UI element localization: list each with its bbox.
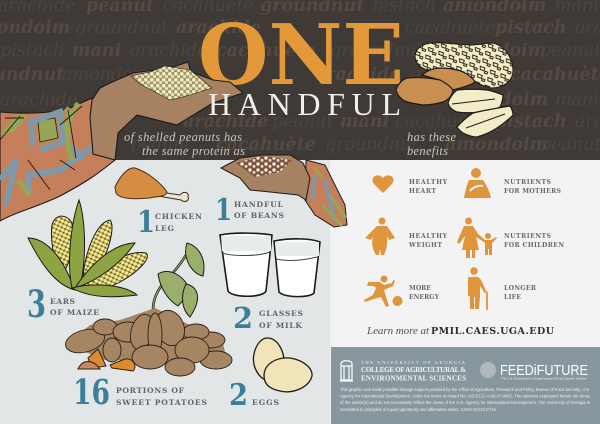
peanut shell — [415, 43, 513, 88]
call to action: learn more: PMIL.CAES.UGA.EDU — [431, 326, 555, 337]
funding disclaimer: committed to principles of equal opportunity and affirmative action. CAES-OCCS FY15 — [340, 407, 497, 412]
repeating word pattern: peanut — [130, 135, 193, 155]
repeating word pattern: peanut — [540, 41, 600, 61]
benefit: nutrients for children — [457, 218, 564, 258]
label: 16 portions of sweet potatoes: 16 — [73, 372, 110, 413]
benefit: nutrients for children: FOR CHILDREN — [504, 242, 564, 249]
illustration: sweet potatoes — [63, 243, 232, 376]
title: ONE: ONE — [198, 6, 404, 104]
dark header band — [0, 0, 600, 160]
label: 1 handful of beans: OF BEANS — [234, 211, 285, 220]
text: has these: has these — [407, 130, 456, 144]
university name: COLLEGE OF AGRICULTURAL & — [361, 366, 466, 374]
repeating word pattern: amondoim — [62, 65, 155, 85]
text: the same protein as: the same protein as — [142, 144, 245, 158]
repeating word pattern: cacahuète — [405, 18, 496, 38]
benefit: longer life: LONGER — [504, 285, 537, 292]
hand — [221, 155, 310, 200]
university name — [361, 360, 466, 382]
label: 1 chicken leg: 1 — [137, 205, 155, 240]
label: 2 eggs: 2 — [229, 378, 248, 413]
husk leaves — [28, 238, 75, 290]
repeating word pattern: pistach — [495, 18, 567, 38]
repeating word pattern: arachide — [315, 65, 400, 85]
university name: ENVIRONMENTAL SCIENCES — [361, 374, 466, 382]
leaves and stem — [153, 243, 204, 317]
repeating word pattern: arachide — [0, 90, 77, 110]
call to action: learn more: Learn more at — [366, 325, 430, 337]
funding disclaimer: This graphic was made possible through support provided by the Office of Agriculture, Research and Policy, Bureau of Food Security, U.S. — [340, 387, 590, 392]
repeating word pattern: groundnut — [325, 135, 419, 155]
benefit: longer life: LIFE — [504, 294, 521, 301]
repeating word pattern: peanut — [272, 112, 335, 132]
benefit: healthy weight — [365, 218, 448, 255]
benefit: healthy weight: WEIGHT — [408, 242, 442, 249]
benefit: nutrients for mothers: NUTRIENTS — [504, 179, 552, 186]
benefit: healthy heart: HEALTHY — [409, 179, 448, 186]
repeating word pattern: cacahuète — [216, 41, 316, 61]
benefit: nutrients for mothers: FOR MOTHERS — [504, 188, 562, 195]
repeating word pattern: groundnut — [75, 18, 169, 38]
repeating word pattern: mani — [340, 112, 389, 132]
hand — [90, 62, 243, 160]
repeating word pattern: arachide — [183, 112, 268, 132]
funding disclaimer: Agency for International Development, under the terms of Award No. AID-ECG-A-00-07-0001. The opinions expressed herein are those — [340, 394, 591, 398]
label: 3 ears of maize: 3 — [27, 282, 46, 326]
repeating word pattern: arachide — [176, 18, 261, 38]
label: 16 portions of sweet potatoes — [73, 372, 208, 413]
repeating word pattern: cacahuète — [395, 112, 486, 132]
logo: USAID seal — [480, 362, 496, 378]
label: 2 glasses of milk — [233, 301, 304, 335]
benefit: nutrients for mothers — [464, 168, 562, 198]
label: 2 glasses of milk: 2 — [233, 301, 253, 335]
benefit: healthy heart — [373, 175, 448, 195]
call to action: learn more — [366, 325, 555, 337]
benefit: healthy weight: HEALTHY — [409, 233, 448, 240]
repeating word pattern — [0, 0, 600, 155]
label: 1 handful of beans: HANDFUL — [234, 200, 284, 209]
label: 3 ears of maize: EARS — [50, 297, 76, 306]
label: 1 chicken leg: CHICKEN — [155, 212, 202, 221]
repeating word pattern: arachide — [130, 41, 207, 61]
right benefits background — [330, 160, 600, 424]
repeating word pattern: mani — [72, 41, 121, 61]
label: 1 handful of beans — [215, 193, 285, 228]
repeating word pattern: cacahuète — [216, 135, 316, 155]
sliced orange pieces — [88, 349, 106, 368]
repeating word pattern: amondoim — [443, 41, 546, 61]
label: 1 chicken leg: LEG — [155, 224, 174, 233]
footer panel — [331, 347, 600, 424]
cream kernel top — [448, 89, 503, 113]
repeating word pattern: pistach — [495, 112, 567, 132]
benefit: longer life — [468, 267, 537, 310]
repeating word pattern: groundnut — [410, 65, 504, 85]
Feed the Future logo: The U.S. Government's Global Hunger & Food Security Initiative — [501, 376, 587, 380]
benefit: more energy: ENERGY — [409, 294, 440, 301]
label: 2 glasses of milk: GLASSES — [259, 309, 304, 318]
illustration: hand with beans — [221, 155, 347, 227]
illustration: glasses of milk — [220, 233, 320, 297]
repeating word pattern: pistach — [0, 41, 64, 61]
label: 2 eggs: EGGS — [252, 398, 280, 407]
tan kernel front — [396, 78, 453, 105]
funding disclaimer: of the author(s) and do not necessarily reflect the views of the U.S. Agency for International Development. The University of Georgia is — [340, 400, 590, 405]
tan kernel back — [422, 68, 475, 90]
sleeve — [305, 160, 347, 227]
cream kernel bottom — [457, 106, 513, 137]
benefit: healthy heart: HEART — [409, 188, 436, 195]
benefit: more energy: MORE — [409, 285, 431, 292]
funding disclaimer — [340, 387, 591, 412]
title: HANDFUL: HANDFUL — [208, 86, 401, 122]
university name: THE UNIVERSITY OF GEORGIA — [361, 360, 466, 365]
repeating word pattern: groundnut — [330, 41, 424, 61]
illustration: chicken leg — [115, 168, 188, 201]
benefit: nutrients for children: NUTRIENTS — [504, 233, 552, 240]
label: 1 handful of beans: 1 — [215, 193, 232, 228]
label: 16 portions of sweet potatoes: SWEET POTATOES — [116, 398, 208, 407]
repeating word pattern: amondoim — [445, 135, 548, 155]
illustration: maize — [28, 200, 147, 297]
illustration: whole peanut and shelled kernels — [396, 43, 513, 137]
potato pile — [63, 306, 232, 376]
label: 16 portions of sweet potatoes: PORTIONS OF — [116, 386, 185, 395]
label: 2 eggs — [229, 378, 280, 413]
repeating word pattern: mani — [555, 90, 599, 110]
left glass — [220, 233, 272, 296]
repeating word pattern: peanut — [540, 135, 600, 155]
right glass — [274, 239, 320, 297]
label: 1 chicken leg — [137, 205, 202, 240]
sleeve — [0, 98, 115, 221]
Feed the Future logo: FEEDiFUTURE — [500, 363, 588, 379]
benefit: more energy — [364, 276, 440, 307]
label: 2 glasses of milk: OF MILK — [259, 321, 302, 330]
illustration: eggs — [253, 338, 312, 392]
label: 3 ears of maize — [27, 282, 99, 326]
beans — [236, 156, 292, 177]
text: of shelled peanuts has: of shelled peanuts has — [124, 130, 242, 144]
text: benefits: benefits — [407, 144, 448, 158]
label: 3 ears of maize: OF MAIZE — [50, 308, 99, 317]
illustration: hand with shelled peanuts — [0, 62, 243, 221]
logo: university column arch — [340, 361, 353, 381]
peanuts in palm — [131, 66, 212, 100]
corn ears — [51, 216, 73, 270]
repeating word pattern: amondoim — [445, 90, 548, 110]
